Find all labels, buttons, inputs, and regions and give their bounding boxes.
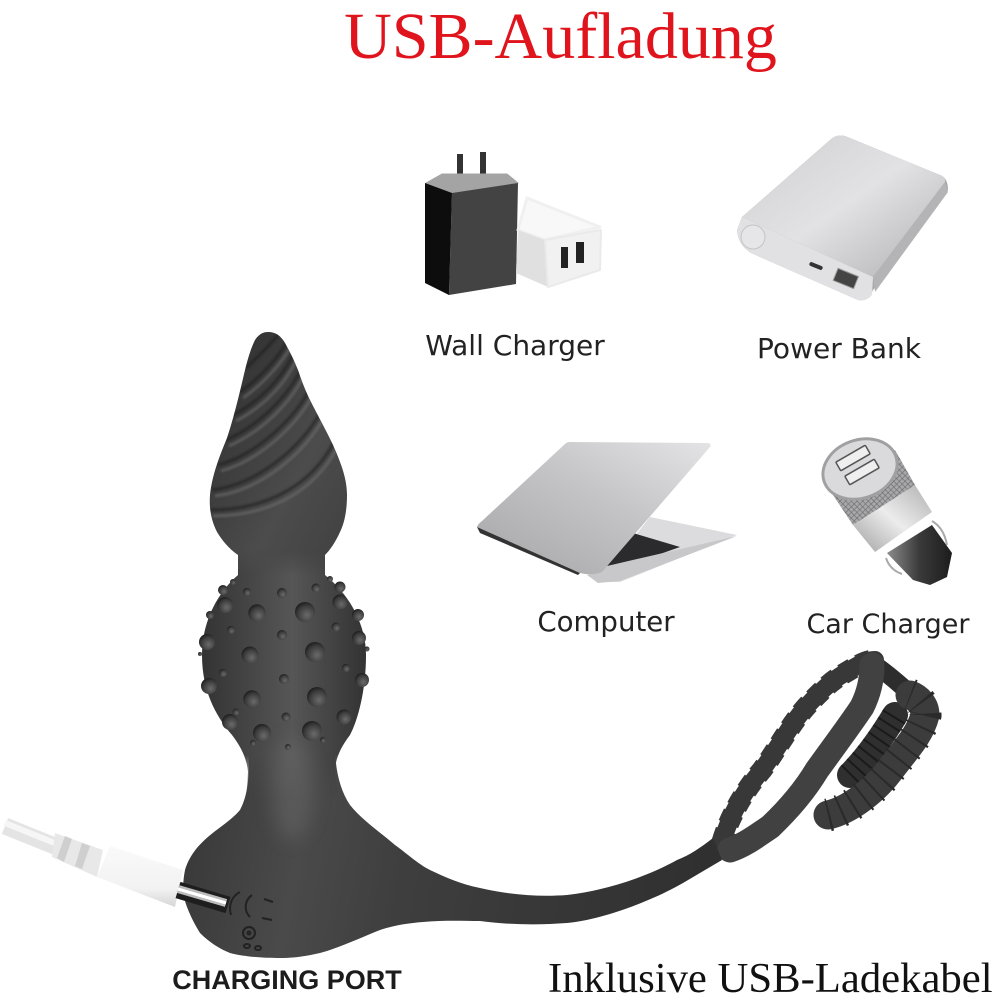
icon: computer bbox=[477, 442, 737, 583]
icon: power bank bbox=[737, 136, 948, 300]
device tip ribs: dark bbox=[210, 335, 335, 510]
device bumps bbox=[198, 576, 370, 750]
icon: wall charger bbox=[425, 152, 601, 295]
charging cable bbox=[5, 823, 228, 907]
label: charging port: CHARGING PORT bbox=[172, 965, 402, 995]
device tail rings bbox=[722, 660, 925, 850]
device tip bbox=[210, 332, 347, 574]
device middle sphere bbox=[202, 550, 366, 798]
device: black silicone product with ribbed tip, textured middle and base bbox=[183, 330, 925, 958]
device markings bbox=[230, 892, 273, 950]
device base and tail bbox=[183, 745, 722, 958]
label: power bank: Power Bank bbox=[757, 332, 922, 365]
label: computer: Computer bbox=[537, 605, 675, 638]
label: car charger: Car Charger bbox=[806, 609, 970, 640]
device neck highlight bbox=[272, 740, 312, 840]
label: wall charger: Wall Charger bbox=[425, 329, 605, 362]
device tip ribs: light bbox=[213, 348, 338, 516]
title: USB-Aufladung bbox=[344, 0, 777, 73]
icon: car charger bbox=[814, 429, 952, 585]
